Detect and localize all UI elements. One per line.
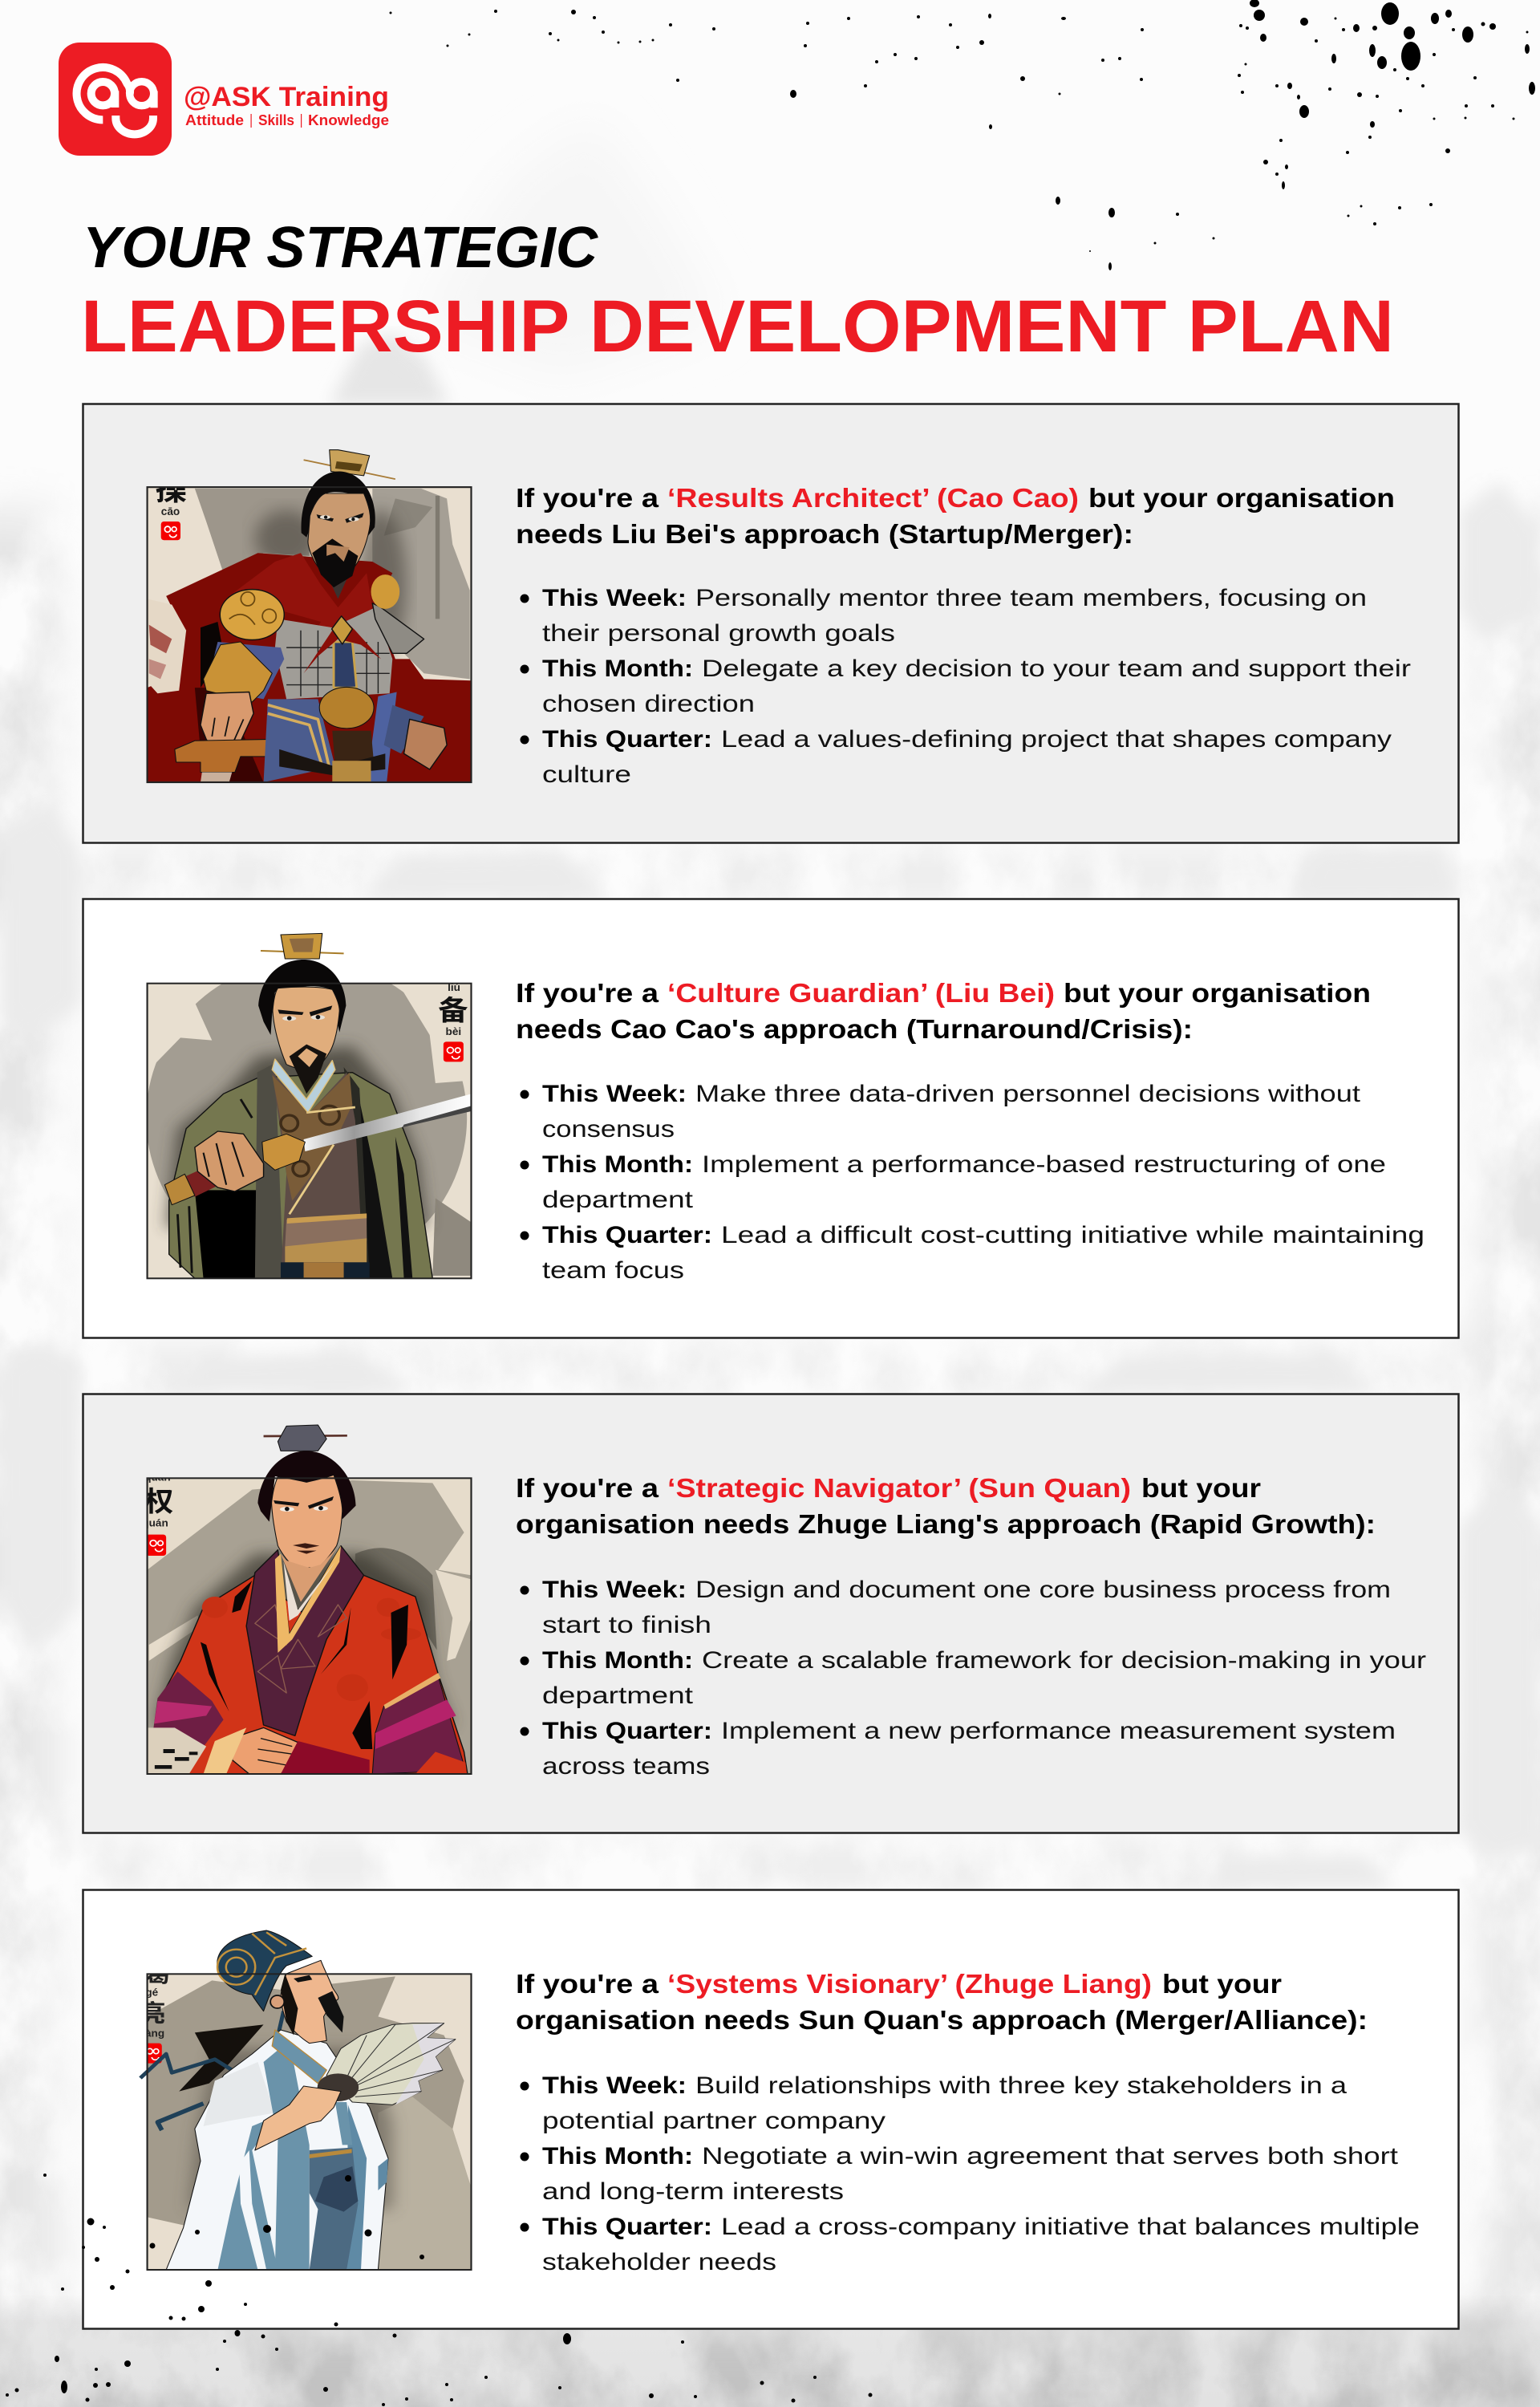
heading: If you're a bbox=[516, 483, 659, 513]
action list: Build relationships with three key stakeholders in a bbox=[695, 2072, 1347, 2099]
ink splatter: top right bbox=[390, 0, 1535, 270]
action list: Delegate a key decision to your team and support their bbox=[702, 656, 1411, 682]
action list: This Quarter: bbox=[542, 1718, 712, 1744]
action list: department bbox=[542, 1682, 694, 1709]
action list: Personally mentor three team members, focusing on bbox=[695, 585, 1367, 611]
name label: Zhuge Liang: 亮 bbox=[140, 2000, 165, 2027]
name label: Liu Bei: 备 bbox=[438, 995, 468, 1026]
icon: red app badge bbox=[59, 43, 172, 156]
name label: Sun Quan: 权 bbox=[144, 1485, 173, 1517]
tagline: Attitude bbox=[185, 112, 244, 128]
tagline bbox=[185, 112, 389, 128]
heading: ‘Results Architect’ (Cao Cao) bbox=[667, 483, 1079, 513]
action list: This Month: bbox=[542, 2143, 693, 2170]
name label: Cao: 操 bbox=[156, 472, 187, 507]
heading: If you're a bbox=[516, 1473, 659, 1503]
heading: but your bbox=[1162, 1969, 1282, 1999]
panel background bbox=[83, 404, 1458, 842]
panel: Cao Cao, Results Architect bbox=[83, 404, 1458, 842]
name label: Sun Quan: quán bbox=[142, 1517, 168, 1529]
action list bbox=[520, 1577, 1426, 1780]
panel: Zhuge Liang, Systems Visionary bbox=[83, 1890, 1458, 2328]
action list: and long-term interests bbox=[542, 2178, 844, 2205]
action list: Lead a cross-company initiative that balances multiple bbox=[721, 2214, 1420, 2240]
heading: If you're a bbox=[516, 978, 659, 1008]
title bbox=[81, 216, 1394, 367]
action list: This Month: bbox=[542, 1151, 693, 1178]
heading: ‘Strategic Navigator’ (Sun Quan) bbox=[667, 1473, 1131, 1503]
action list: Design and document one core business process from bbox=[695, 1577, 1391, 1603]
action list: Negotiate a win-win agreement that serves both short bbox=[702, 2143, 1399, 2170]
name label: Liu Bei: bèi bbox=[446, 1025, 461, 1037]
action list: This Quarter: bbox=[542, 2214, 712, 2240]
heading: organisation needs Zhuge Liang's approach (Rapid Growth): bbox=[516, 1509, 1376, 1539]
name label: Sun Quan bbox=[148, 1479, 173, 1556]
panel background bbox=[83, 1394, 1458, 1833]
action list: stakeholder needs bbox=[542, 2249, 776, 2275]
heading: organisation needs Sun Quan's approach (Merger/Alliance): bbox=[516, 2005, 1368, 2035]
heading: needs Cao Cao's approach (Turnaround/Crisis): bbox=[516, 1014, 1193, 1044]
title line 1: YOUR STRATEGIC bbox=[83, 216, 598, 280]
panel: Sun Quan, Strategic Navigator bbox=[83, 1394, 1458, 1833]
heading: but your organisation bbox=[1088, 483, 1395, 513]
portrait: Zhuge Liang bbox=[139, 1930, 471, 2270]
action list: Implement a new performance measurement system bbox=[721, 1718, 1396, 1744]
action list bbox=[520, 2072, 1420, 2275]
name label: Zhuge Liang bbox=[148, 1975, 168, 2064]
heading: ‘Culture Guardian’ (Liu Bei) bbox=[667, 978, 1055, 1008]
heading: needs Liu Bei's approach (Startup/Merger): bbox=[516, 519, 1133, 549]
action list: Lead a difficult cost-cutting initiative while maintaining bbox=[721, 1222, 1424, 1248]
action list: team focus bbox=[542, 1257, 684, 1284]
action list: across teams bbox=[542, 1753, 710, 1780]
heading: ‘Systems Visionary’ (Zhuge Liang) bbox=[667, 1969, 1152, 1999]
name label: Sun Quan: quan bbox=[144, 1471, 171, 1484]
name label: Liu Bei: liú bbox=[448, 981, 460, 993]
heading bbox=[516, 1969, 1368, 2035]
action list: This Quarter: bbox=[542, 1222, 712, 1248]
panel: Liu Bei, Culture Guardian bbox=[83, 899, 1458, 1338]
action list: Implement a performance-based restructuring of one bbox=[702, 1151, 1386, 1178]
action list: chosen direction bbox=[542, 691, 755, 717]
action list: potential partner company bbox=[542, 2108, 886, 2134]
action list: This Month: bbox=[542, 656, 693, 682]
heading: but your bbox=[1141, 1473, 1261, 1503]
action list: consensus bbox=[542, 1116, 675, 1143]
ink splatter: bottom left bbox=[6, 2174, 873, 2406]
action list: This Week: bbox=[542, 585, 687, 611]
action list: This Week: bbox=[542, 1081, 687, 1107]
panel background bbox=[83, 899, 1458, 1338]
name label: Zhuge Liang: 葛 bbox=[144, 1960, 170, 1987]
action list: start to finish bbox=[542, 1612, 711, 1638]
heading bbox=[516, 1473, 1376, 1539]
action list: Make three data-driven personnel decisions without bbox=[695, 1081, 1361, 1107]
tagline: Skills bbox=[258, 112, 294, 128]
heading: but your organisation bbox=[1064, 978, 1371, 1008]
title line 2: LEADERSHIP DEVELOPMENT PLAN bbox=[81, 286, 1394, 367]
portrait: Cao Cao bbox=[148, 450, 471, 782]
name label: Liu Bei bbox=[438, 981, 468, 1061]
name label: Cao: cāo bbox=[161, 505, 180, 518]
action list: Lead a values-defining project that shapes company bbox=[721, 726, 1392, 753]
action list: This Week: bbox=[542, 1577, 687, 1603]
tagline: Knowledge bbox=[308, 112, 389, 128]
heading: If you're a bbox=[516, 1969, 659, 1999]
action list: This Month: bbox=[542, 1647, 693, 1674]
heading bbox=[516, 978, 1371, 1044]
action list bbox=[520, 1081, 1424, 1284]
name label: Cao bbox=[156, 488, 186, 541]
brand name: @ASK Training bbox=[184, 82, 389, 112]
portrait: Sun Quan bbox=[142, 1425, 471, 1774]
action list: their personal growth goals bbox=[542, 620, 895, 647]
name label: Zhuge Liang: liàng bbox=[139, 2027, 164, 2040]
panel background bbox=[83, 1890, 1458, 2328]
action list: department bbox=[542, 1187, 694, 1213]
heading bbox=[516, 483, 1395, 549]
logo: @ASK Training bbox=[59, 43, 389, 156]
portrait: Liu Bei bbox=[146, 933, 471, 1278]
name label: Zhuge Liang: gé bbox=[145, 1987, 158, 1999]
action list: culture bbox=[542, 761, 631, 788]
action list: Create a scalable framework for decision-making in your bbox=[702, 1647, 1426, 1674]
action list bbox=[520, 585, 1411, 788]
action list: This Quarter: bbox=[542, 726, 712, 753]
action list: This Week: bbox=[542, 2072, 687, 2099]
